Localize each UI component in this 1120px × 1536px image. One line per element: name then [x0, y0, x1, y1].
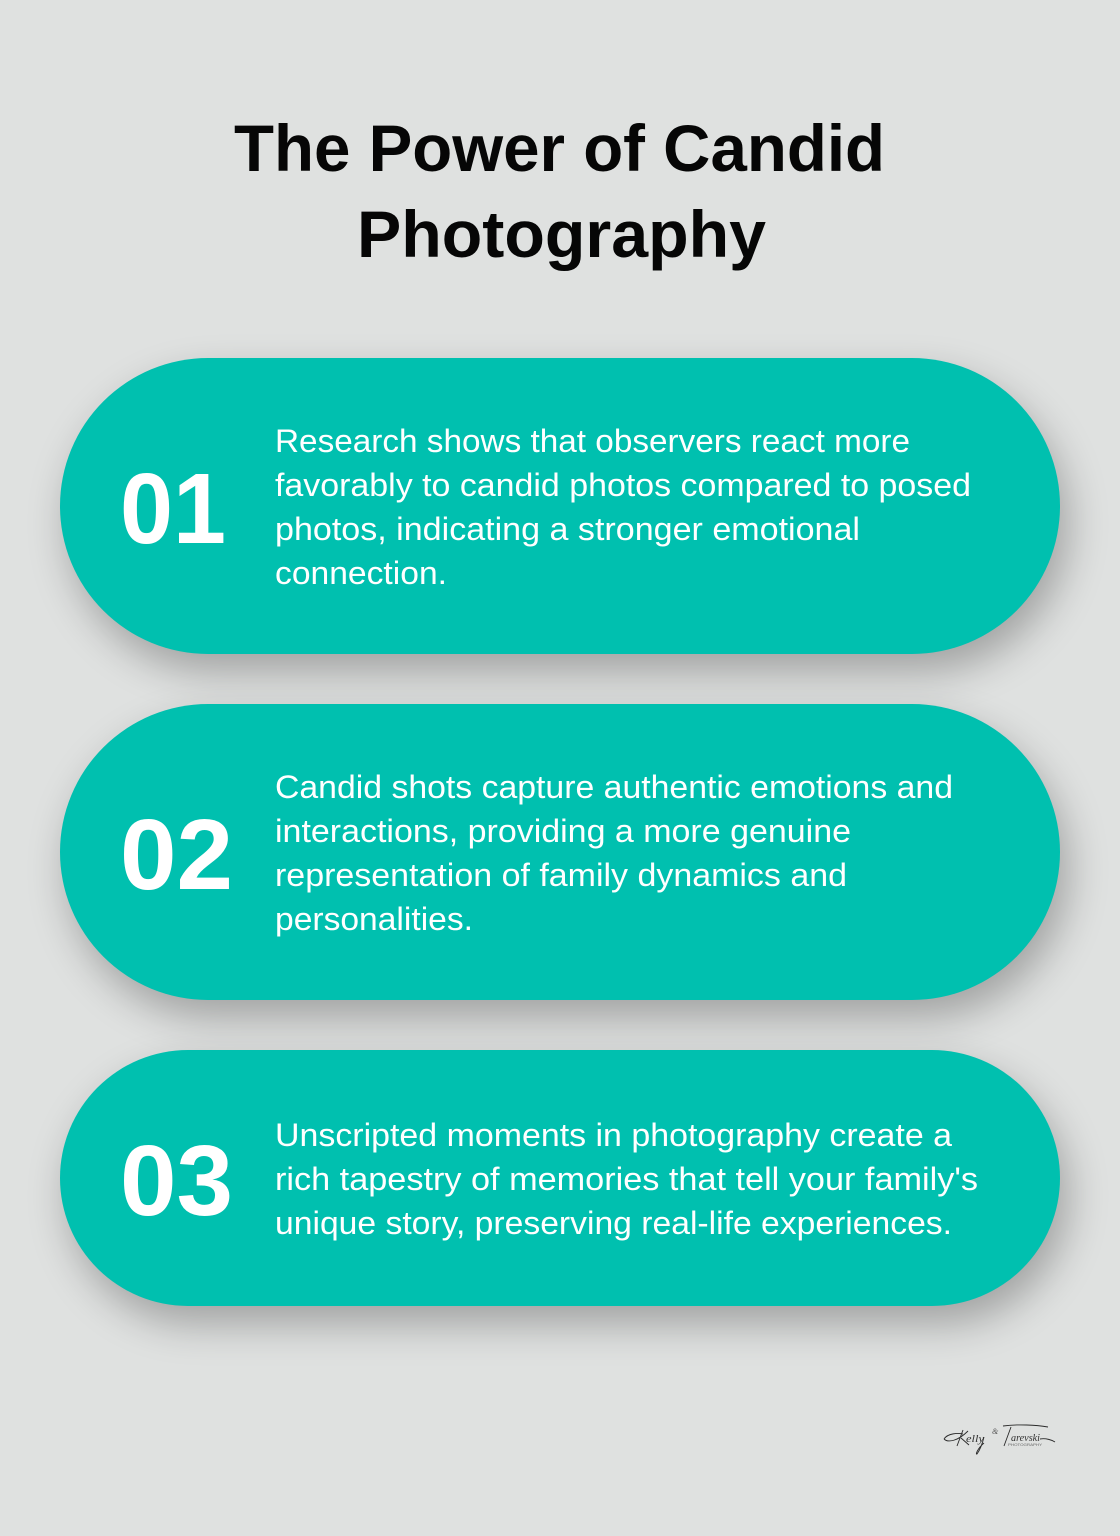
number 03: 03 — [120, 1125, 233, 1237]
panel: card 2 background — [60, 704, 1060, 1000]
signature logo: PHOTOGRAPHY — [1008, 1443, 1043, 1447]
number 01: 01 — [120, 453, 226, 565]
panel: card 1 background — [60, 358, 1060, 654]
text block: card 2: Candid shots capture authentic emotions and — [275, 769, 953, 805]
text block: card 2: representation of family dynamics and — [275, 857, 847, 893]
text block: card 1: favorably to candid photos compared to posed — [275, 467, 971, 503]
text block: card 3 — [275, 1117, 978, 1241]
text block: card 3: unique story, preserving real-life experiences. — [275, 1205, 952, 1241]
signature logo: arevski — [1011, 1432, 1040, 1444]
text block: card 3: rich tapestry of memories that tell your family's — [275, 1161, 978, 1197]
signature logo — [944, 1425, 1055, 1454]
text block: card 1: connection. — [275, 555, 447, 591]
title: The Power of Candid — [234, 111, 885, 185]
signature logo: & — [992, 1427, 999, 1436]
text block: card 2: personalities. — [275, 901, 473, 937]
text block: card 2 — [275, 769, 953, 937]
text block: card 2: interactions, providing a more genuine — [275, 813, 851, 849]
number 02: 02 — [120, 799, 233, 911]
text block: card 1: Research shows that observers react more — [275, 423, 910, 459]
title — [234, 111, 885, 271]
panel: card 3 background — [60, 1050, 1060, 1306]
text block: card 1 — [275, 423, 971, 591]
signature logo: elly — [966, 1433, 984, 1445]
text block: card 3: Unscripted moments in photography create a — [275, 1117, 953, 1153]
title: Photography — [357, 197, 766, 271]
text block: card 1: photos, indicating a stronger emotional — [275, 511, 860, 547]
